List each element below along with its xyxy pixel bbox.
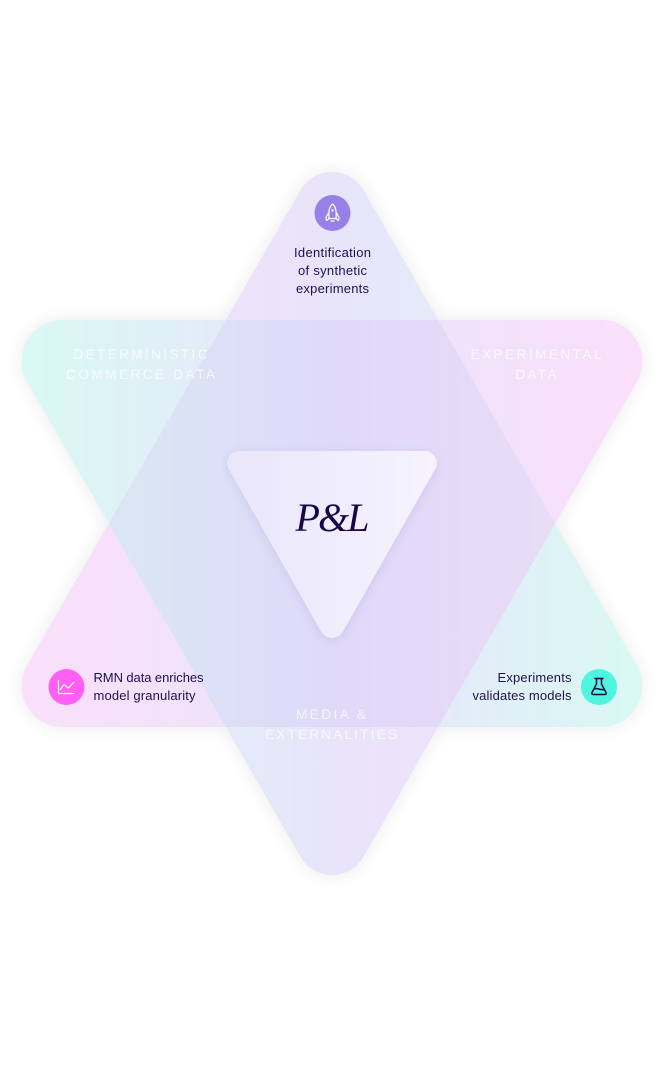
label: media and externalities	[265, 707, 397, 742]
text: RMN data enriches model granularity: RMN data enriches	[94, 670, 204, 685]
downward triangle: teal to pink	[22, 320, 642, 875]
text: RMN data enriches model granularity: model granularity	[94, 688, 196, 703]
icon: rocket	[314, 195, 350, 231]
center triangle shadow	[227, 453, 437, 640]
text: experiments validates models	[472, 670, 572, 703]
text: experiments validates models: Experiments	[498, 670, 572, 685]
text: identification of synthetic experiments: of synthetic	[298, 263, 368, 278]
label: deterministic commerce data: COMMERCE DATA	[66, 367, 215, 382]
soft shadow behind triangles	[22, 172, 642, 875]
callout: experiments	[472, 669, 617, 705]
icon: line chart	[48, 669, 84, 705]
upward triangle: pink to teal	[22, 172, 642, 727]
text: identification of synthetic experiments: Identification	[294, 245, 371, 260]
center triangle: P&L	[227, 451, 437, 638]
P&L heading: P&L	[294, 495, 370, 540]
label: media and externalities: MEDIA &	[296, 707, 366, 722]
icon: flask	[581, 669, 617, 705]
label: experimental data: EXPERIMENTAL	[470, 347, 602, 362]
label: deterministic commerce data: DETERMINISTIC	[74, 347, 208, 362]
callout: synthetic experiments	[294, 195, 371, 296]
text: identification of synthetic experiments: experiments	[296, 281, 370, 296]
label: deterministic commerce data	[66, 347, 215, 382]
callout: RMN data	[48, 669, 204, 705]
text: RMN data enriches model granularity	[94, 670, 204, 703]
text: experiments validates models: validates models	[472, 688, 572, 703]
label: media and externalities: EXTERNALITIES	[265, 727, 397, 742]
text: identification of synthetic experiments	[294, 245, 371, 296]
label: experimental data: DATA	[516, 367, 556, 382]
label: experimental data	[470, 347, 602, 382]
